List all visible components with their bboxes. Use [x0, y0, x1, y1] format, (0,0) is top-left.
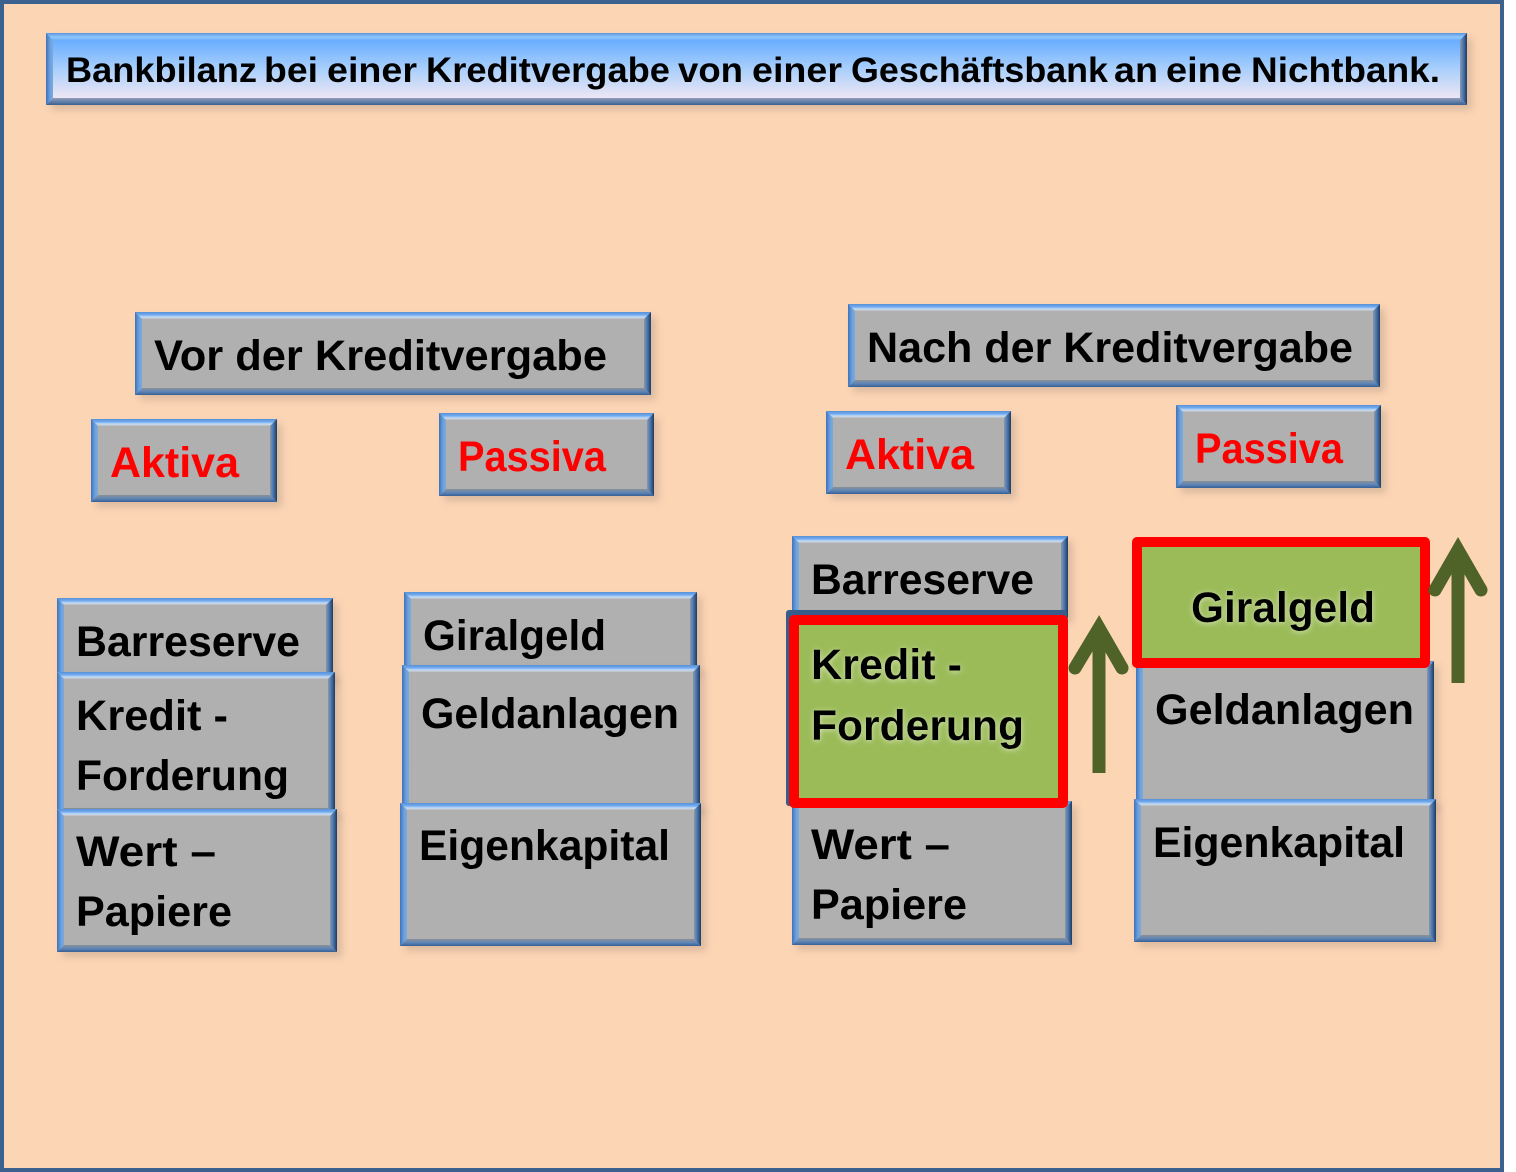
box: Kredit-Forderung (vor): Kredit - [76, 692, 228, 740]
highlighted box: Kredit-Forderung (nach): Kredit - [811, 641, 962, 689]
box: Eigenkapital (vor): Eigenkapital [419, 822, 670, 870]
box: Geldanlagen (vor) [402, 665, 700, 810]
box: Geldanlagen (nach) [1136, 661, 1434, 806]
heading: Aktiva (vor): Aktiva [110, 439, 240, 487]
box: Kredit-Forderung (vor): Forderung [76, 752, 289, 800]
title: Bankbilanz [66, 51, 257, 90]
heading: Vor der Kreditvergabe [135, 312, 651, 395]
box: Barreserve (nach): Barreserve [811, 556, 1034, 604]
box: Wert-Papiere (nach) [792, 801, 1072, 945]
box: Giralgeld (vor) [404, 592, 697, 672]
heading: Aktiva (vor) [91, 419, 277, 502]
title: einer [327, 51, 417, 90]
heading: Passiva (nach): Passiva [1195, 425, 1344, 473]
title: eine [1166, 51, 1242, 90]
box: Wert-Papiere (vor): Papiere [76, 888, 232, 936]
heading: Nach der Kreditvergabe: Nach der Kreditvergabe [867, 324, 1353, 372]
highlighted box: Giralgeld (nach): Giralgeld [1191, 584, 1375, 632]
highlighted box: Kredit-Forderung (nach) [786, 610, 1067, 806]
heading: Passiva (vor): Passiva [458, 433, 607, 481]
title: Nichtbank. [1251, 51, 1440, 90]
box: Giralgeld (vor): Giralgeld [423, 612, 606, 660]
box: Eigenkapital (nach): Eigenkapital [1153, 819, 1405, 867]
arrow: Giralgeld increases [1435, 550, 1481, 683]
title: einer [752, 51, 842, 90]
title: bei [264, 51, 318, 90]
title [46, 33, 1467, 105]
arrow: Kredit-Forderung increases [1075, 628, 1122, 773]
box: Wert-Papiere (vor): Wert – [76, 828, 216, 876]
box: Barreserve (vor): Barreserve [76, 618, 300, 666]
title: von [678, 51, 743, 90]
box: Eigenkapital (vor) [400, 803, 701, 946]
heading: Aktiva (nach) [826, 411, 1011, 494]
box: Geldanlagen (vor): Geldanlagen [421, 690, 679, 738]
box: Wert-Papiere (nach): Papiere [811, 881, 967, 929]
box: Barreserve (nach) [792, 536, 1068, 618]
heading: Passiva (nach) [1176, 405, 1381, 488]
heading: Passiva (vor) [439, 413, 654, 496]
box: Wert-Papiere (vor) [57, 809, 337, 952]
heading: Vor der Kreditvergabe: Vor der Kreditvergabe [154, 332, 607, 380]
box: Eigenkapital (nach) [1134, 799, 1436, 942]
heading: Nach der Kreditvergabe [848, 304, 1380, 387]
title: an [1114, 51, 1158, 90]
heading: Aktiva (nach): Aktiva [845, 431, 975, 479]
box: Kredit-Forderung (vor) [57, 672, 335, 815]
box: Wert-Papiere (nach): Wert – [811, 821, 950, 869]
box: Geldanlagen (nach): Geldanlagen [1155, 686, 1414, 734]
highlighted box: Giralgeld (nach) [1137, 542, 1425, 663]
highlighted box: Kredit-Forderung (nach): Forderung [811, 702, 1024, 750]
title: Geschäftsbank [851, 51, 1109, 90]
box: Barreserve (vor) [57, 598, 333, 680]
title: Kreditvergabe [426, 51, 670, 90]
